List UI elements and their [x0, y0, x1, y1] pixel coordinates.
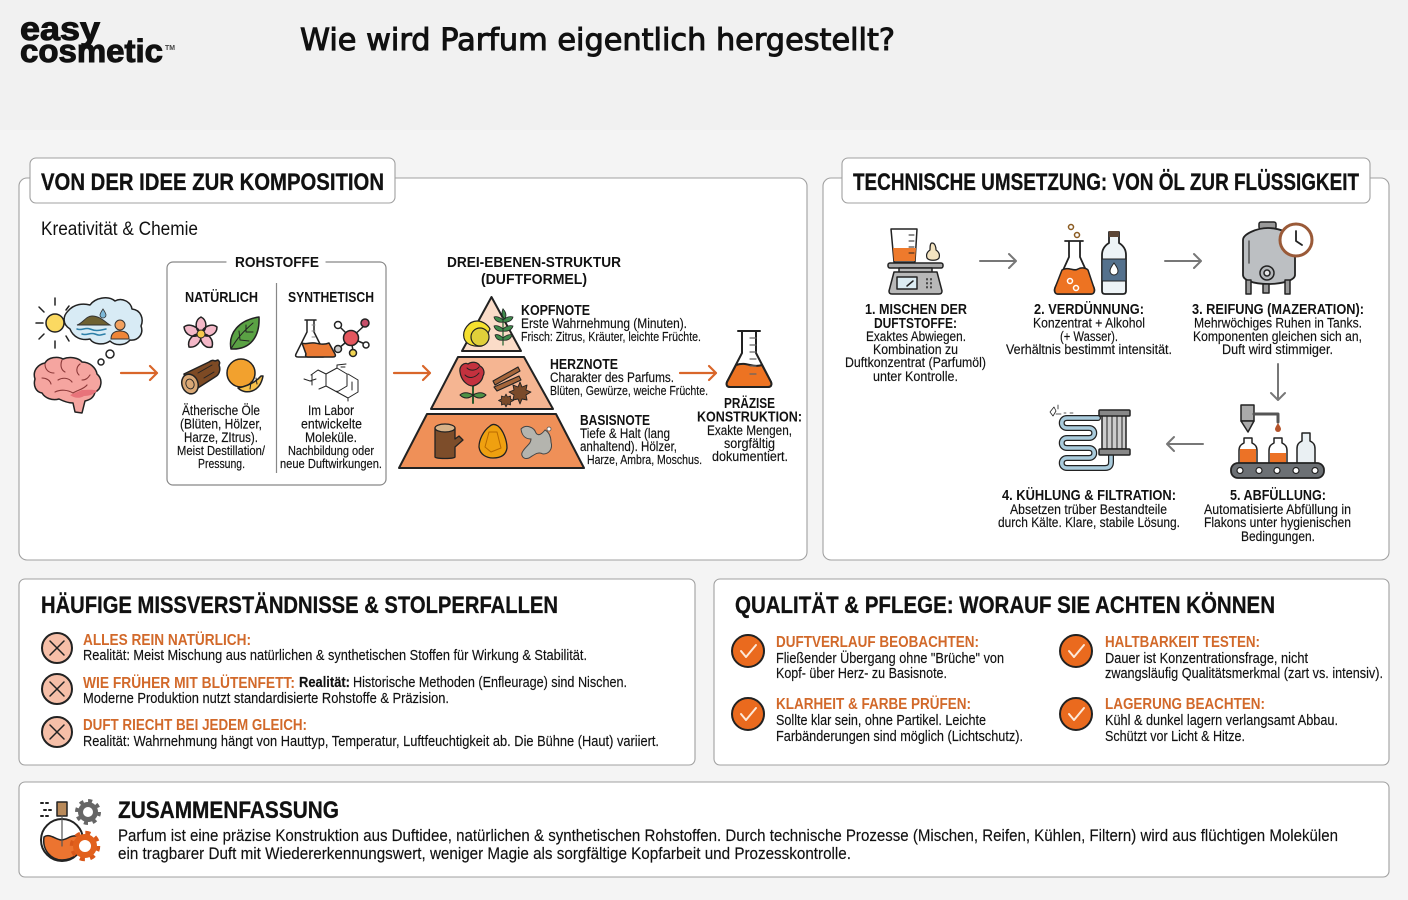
step 1 text: [845, 301, 986, 384]
item: alles rein natürlich: Realität: Meist Mischung aus natürlichen & synthetischen Stoffen für Wirkung & Stabilität.: [83, 648, 587, 664]
logo: easy cosmetic: TM: [165, 45, 175, 52]
text: präzise Konstruktion: dokumentiert.: [712, 449, 788, 464]
icon: flower: [184, 317, 217, 347]
item: Duftverlauf beobachten: Fließender Übergang ohne "Brüche" von: [776, 649, 1004, 667]
icon: cross 2: [42, 674, 72, 704]
panel: von der Idee zur Komposition: [19, 158, 807, 560]
heading: Qualität und Pflege: QUALITÄT & PFLEGE: WORAUF SIE ACHTEN KÖNNEN: [735, 592, 1275, 619]
panel: Missverständnisse: [19, 579, 695, 765]
step 1 text: unter Kontrolle.: [873, 369, 958, 384]
step 2 text: Verhältnis bestimmt intensität.: [1006, 342, 1172, 357]
panel: Zusammenfassung: [19, 782, 1389, 877]
arrow: [980, 254, 1016, 268]
arrow: [394, 366, 430, 380]
text: Kopfnote: [521, 302, 701, 344]
icon: lab flask: [296, 320, 335, 357]
arrow: [121, 366, 157, 380]
icon: cross 1: [42, 633, 72, 663]
heading: Zusammenfassung: ZUSAMMENFASSUNG: [118, 797, 339, 824]
item: alles rein natürlich: [83, 630, 587, 664]
column: synthetisch: SYNTHETISCH: [288, 289, 374, 306]
item: Duftverlauf beobachten: [776, 634, 1004, 682]
icon: perfume bottle with gears: [41, 801, 99, 861]
text: synthetisch: Im Labor: [308, 403, 354, 418]
step 4 text: 4. KÜHLUNG & FILTRATION:: [1002, 487, 1176, 504]
item: Duft riecht bei jedem gleich: [83, 717, 659, 750]
text: präzise Konstruktion: [697, 395, 802, 464]
text: Zusammenfassung: ein tragbarer Duft mit Wiedererkennungswert, weniger Magie als sorgfältige Kopfarbeit und Prozesskontrolle.: [118, 844, 851, 863]
step 5 text: [1204, 487, 1351, 544]
step 3 text: 3. REIFUNG (MAZERATION):: [1192, 301, 1364, 318]
item: Haltbarkeit testen: HALTBARKEIT TESTEN:: [1105, 634, 1260, 651]
text: Herznote: HERZNOTE: [550, 356, 618, 373]
text: natürlich: (Blüten, Hölzer,: [180, 416, 262, 432]
text: Zusammenfassung: [118, 826, 1338, 863]
item: Duftverlauf beobachten: DUFTVERLAUF BEOBACHTEN:: [776, 634, 979, 651]
icon: leaf: [231, 317, 259, 349]
column: natürlich: NATÜRLICH: [185, 289, 258, 306]
column: natürlich: [177, 289, 265, 471]
icon: molecule: [334, 319, 369, 356]
item: Klarheit und Farbe prüfen: KLARHEIT & FARBE PRÜFEN:: [776, 694, 971, 713]
icon: log: [179, 360, 220, 396]
heading: Drei-Ebenen-Struktur: (DUFTFORMEL): [481, 271, 587, 288]
icon: orange: [227, 359, 263, 392]
text: Kopfnote: Frisch: Zitrus, Kräuter, leichte Früchte.: [521, 330, 701, 344]
arrow: [680, 366, 716, 380]
item: Duftverlauf beobachten: Kopf- über Herz- zu Basisnote.: [776, 666, 947, 682]
text: Basisnote: Harze, Ambra, Moschus.: [587, 453, 702, 467]
item: wie früher mit Blütenfett: Historische Methoden (Enfleurage) sind Nischen.: [353, 675, 627, 691]
heading: Rohstoffe: ROHSTOFFE: [235, 254, 319, 271]
step 5 text: Flakons unter hygienischen: [1204, 515, 1351, 530]
item: Lagerung beachten: Schützt vor Licht & Hitze.: [1105, 729, 1245, 745]
item: Klarheit und Farbe prüfen: Sollte klar sein, ohne Partikel. Leichte: [776, 713, 986, 729]
item: Duft riecht bei jedem gleich: DUFT RIECHT BEI JEDEM GLEICH:: [83, 717, 307, 734]
column: synthetisch: [280, 289, 382, 471]
icon: rose: [460, 362, 486, 403]
step 3 text: Komponenten gleichen sich an,: [1193, 329, 1362, 344]
text: präzise Konstruktion: Exakte Mengen,: [707, 423, 792, 438]
text: Herznote: Charakter des Parfums.: [550, 370, 674, 385]
text: präzise Konstruktion: sorgfältig: [724, 436, 775, 451]
icon: scale with beaker: [888, 229, 943, 294]
text: Kopfnote: Erste Wahrnehmung (Minuten).: [521, 316, 687, 331]
logo: easy cosmetic: easy: [20, 10, 101, 47]
step 5 text: Automatisierte Abfüllung in: [1204, 502, 1351, 517]
text: Basisnote: anhaltend). Hölzer,: [580, 439, 677, 454]
text: natürlich: Pressung.: [198, 457, 245, 471]
text: synthetisch: Moleküle.: [305, 430, 357, 445]
text: Basisnote: BASISNOTE: [580, 412, 650, 429]
item: Lagerung beachten: Kühl & dunkel lagern verlangsamt Abbau.: [1105, 713, 1338, 729]
heading: Drei-Ebenen-Struktur: [447, 254, 621, 288]
text: präzise Konstruktion: KONSTRUKTION:: [697, 408, 802, 426]
icon: cinnamon and star anise: [493, 367, 531, 407]
step 3 text: [1192, 301, 1364, 357]
text: Herznote: [550, 356, 708, 398]
heading: Missverständnisse: HÄUFIGE MISSVERSTÄNDNISSE & STOLPERFALLEN: [41, 592, 558, 619]
text: natürlich: Ätherische Öle: [182, 403, 260, 418]
step 5 text: Bedingungen.: [1241, 529, 1315, 544]
icon: filling line: [1231, 405, 1324, 478]
item: wie früher mit Blütenfett: WIE FRÜHER MIT BLÜTENFETT:: [83, 673, 295, 692]
text: Kopfnote: KOPFNOTE: [521, 302, 590, 319]
text: präzise Konstruktion: PRÄZISE: [724, 395, 775, 412]
icon: ambergris: [521, 426, 552, 458]
step 1 text: Kombination zu: [873, 342, 958, 357]
icon: check 4: [1060, 698, 1092, 730]
icon: idea cloud and brain: [34, 298, 142, 413]
step 2 text: [1006, 301, 1172, 357]
step 5 text: 5. ABFÜLLUNG:: [1230, 487, 1326, 504]
item: wie früher mit Blütenfett: Realität:: [299, 675, 350, 691]
step 2 text: Konzentrat + Alkohol: [1033, 316, 1145, 330]
item: alles rein natürlich: ALLES REIN NATÜRLICH:: [83, 630, 251, 649]
step 3 text: Mehrwöchiges Ruhen in Tanks.: [1194, 316, 1362, 330]
icon: structural formula: [304, 364, 358, 401]
item: Duft riecht bei jedem gleich: Realität: Wahrnehmung hängt von Hauttyp, Temperatur, Luftfeuchtigkeit ab. Die Bühne (Haut) variiert.: [83, 734, 659, 750]
text: synthetisch: Nachbildung oder: [288, 444, 374, 458]
item: Lagerung beachten: [1105, 696, 1338, 745]
text: Basisnote: [580, 412, 702, 467]
step 1 text: DUFTSTOFFE:: [874, 315, 957, 332]
icon: wood trunk: [435, 424, 463, 458]
heading: Drei-Ebenen-Struktur: DREI-EBENEN-STRUKTUR: [447, 254, 621, 271]
text: synthetisch: entwickelte: [301, 416, 362, 432]
icon: precision flask: [727, 331, 771, 387]
logo: easy cosmetic: cosmetic: [20, 33, 163, 69]
heading: von der Idee zur Komposition: [30, 158, 395, 203]
title: Wie wird Parfum eigentlich hergestellt?: [300, 23, 895, 58]
icon: lemon: [464, 321, 490, 346]
text: natürlich: Meist Destillation/: [177, 444, 265, 458]
arrow: [1271, 364, 1285, 400]
heading: technische Umsetzung: [842, 158, 1370, 203]
text: natürlich: [177, 403, 265, 471]
pyramid: [399, 297, 584, 468]
step 1 text: 1. MISCHEN DER: [865, 301, 967, 318]
icon: maturation tank with clock: [1243, 222, 1312, 294]
arrow: [1167, 437, 1203, 451]
text: natürlich: Harze, ZItrus).: [184, 430, 258, 445]
icon: cross 3: [42, 717, 72, 747]
step 2 text: (+ Wasser).: [1060, 329, 1118, 344]
panel: technische Umsetzung: [823, 158, 1389, 560]
item: Haltbarkeit testen: Dauer ist Konzentrationsfrage, nicht: [1105, 651, 1308, 667]
item: Klarheit und Farbe prüfen: [776, 694, 1023, 745]
step 1 text: Duftkonzentrat (Parfumöl): [845, 355, 986, 370]
icon: herb: [494, 309, 513, 345]
icon: amber: [479, 424, 507, 458]
icon: cooling coil and filter: [1050, 405, 1130, 468]
item: Klarheit und Farbe prüfen: Farbänderungen sind möglich (Lichtschutz).: [776, 729, 1023, 745]
logo: easy cosmetic: [20, 10, 175, 69]
step 3 text: Duft wird stimmiger.: [1222, 342, 1333, 357]
icon: flask and alcohol bottle: [1055, 224, 1126, 294]
group: Rohstoffe: [167, 254, 386, 485]
item: Lagerung beachten: LAGERUNG BEACHTEN:: [1105, 696, 1265, 713]
icon: check 2: [732, 698, 764, 730]
item: wie früher mit Blütenfett: [83, 673, 627, 707]
item: Haltbarkeit testen: [1105, 634, 1383, 682]
text: Herznote: Blüten, Gewürze, weiche Früchte.: [550, 384, 708, 398]
subheading: Kreativität & Chemie: [41, 219, 198, 240]
step 4 text: durch Kälte. Klare, stabile Lösung.: [998, 515, 1180, 530]
icon: check 3: [1060, 635, 1092, 667]
step 4 text: [998, 487, 1180, 530]
step 4 text: Absetzen trüber Bestandteile: [1010, 502, 1167, 517]
heading: von der Idee zur Komposition: VON DER IDEE ZUR KOMPOSITION: [41, 169, 384, 196]
step 2 text: 2. VERDÜNNUNG:: [1034, 301, 1144, 318]
icon: check 1: [732, 635, 764, 667]
text: synthetisch: [280, 403, 382, 471]
step 1 text: Exaktes Abwiegen.: [866, 329, 966, 344]
arrow: [1165, 254, 1201, 268]
item: wie früher mit Blütenfett: Moderne Produktion nutzt standardisierte Rohstoffe & Präzision.: [83, 691, 449, 707]
text: synthetisch: neue Duftwirkungen.: [280, 457, 382, 471]
panel: Qualität und Pflege: [714, 579, 1389, 765]
text: Basisnote: Tiefe & Halt (lang: [580, 426, 670, 441]
